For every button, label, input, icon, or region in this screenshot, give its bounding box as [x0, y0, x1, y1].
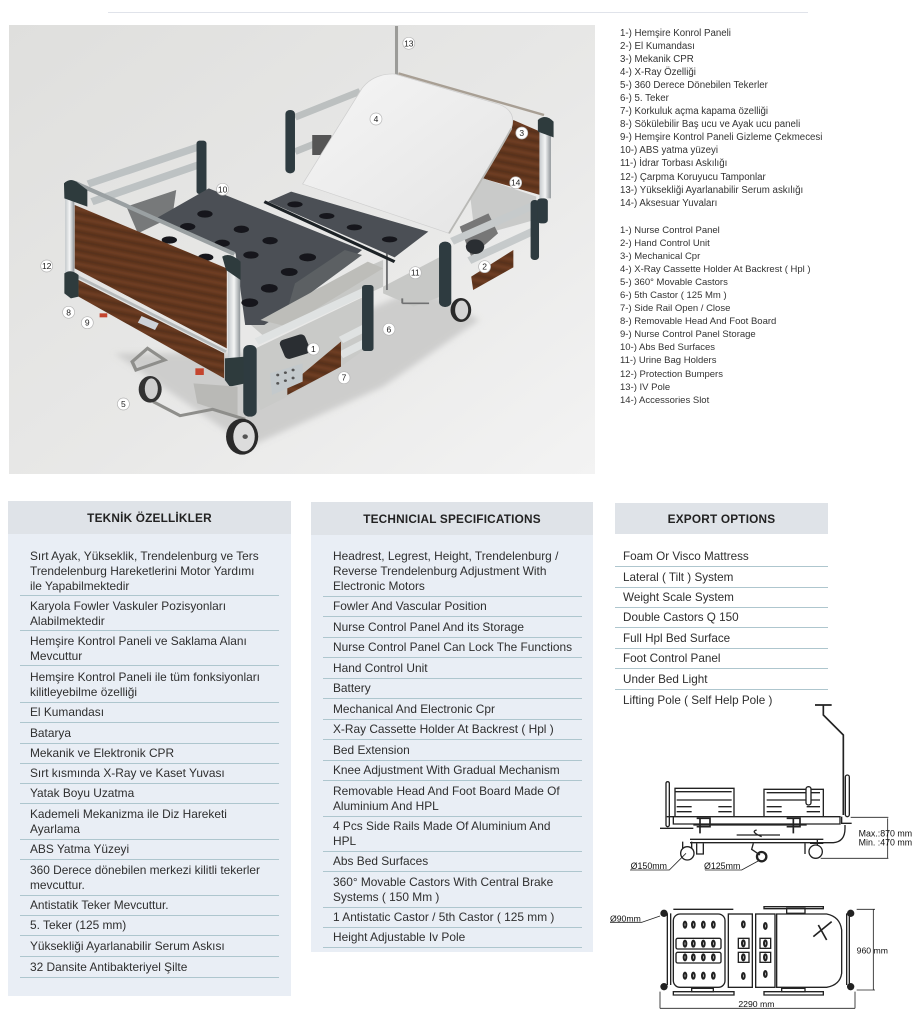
photo background	[9, 25, 595, 474]
numbered callouts: 13	[404, 38, 414, 48]
legend: English part list: 1-) Nurse Control Panel	[620, 225, 720, 236]
legend: Turkish part list: 4-) X-Ray Özelliği	[620, 67, 696, 78]
panel: export options: Weight Scale System	[623, 591, 734, 604]
legend: English part list: 6-) 5th Castor ( 125 Mm )	[620, 290, 727, 301]
panel: export options: Lifting Pole ( Self Help Pole )	[623, 694, 772, 707]
legend: English part list: 13-) IV Pole	[620, 382, 670, 393]
dimension labels, side view: Ø150mm	[631, 861, 667, 871]
legend: English part list: 2-) Hand Control Unit	[620, 238, 710, 249]
legend: Turkish part list: 2-) El Kumandası	[620, 41, 695, 52]
legend: Turkish part list	[620, 28, 822, 209]
panel: English technical specifications: Nurse Control Panel And its Storage	[333, 620, 524, 634]
legend: English part list: 5-) 360° Movable Castors	[620, 277, 728, 288]
dimension labels, side view: Min. :470 mm	[859, 837, 912, 847]
panel: export options	[615, 503, 828, 707]
panel: English technical specifications: X-Ray Cassette Holder At Backrest ( Hpl )	[333, 722, 554, 736]
numbered callouts: 1	[311, 344, 316, 354]
panel: English technical specifications: 1 Antistatic Castor / 5th Castor ( 125 mm )	[333, 910, 554, 924]
panel: Turkish technical features: Mevcuttur	[30, 649, 82, 663]
numbered callouts: 5	[121, 399, 126, 409]
legend: Turkish part list: 11-) İdrar Torbası Askılığı	[620, 158, 727, 169]
panel: English technical specifications: Nurse Control Panel Can Lock The Functions	[333, 640, 572, 654]
panel: Turkish technical features: Alabilmektedir	[30, 614, 105, 628]
legend: English part list: 14-) Accessories Slot	[620, 395, 709, 406]
panel: Turkish technical features: Sırt kısmında X-Ray ve Kaset Yuvası	[30, 766, 225, 780]
dimension labels, top view	[610, 914, 888, 1009]
panel: English technical specifications: Hand Control Unit	[333, 661, 428, 675]
numbered callouts: 12	[42, 261, 52, 271]
panel: English technical specifications: Bed Extension	[333, 743, 410, 757]
dimension labels, top view: 2290 mm	[738, 999, 774, 1009]
legend: Turkish part list: 8-) Sökülebilir Baş ucu ve Ayak ucu paneli	[620, 119, 800, 130]
panel: Turkish technical features: Yatak Boyu Uzatma	[30, 786, 134, 800]
panel: Turkish technical features: 32 Dansite Antibakteriyel Şilte	[30, 960, 187, 974]
heading: Teknik Özellikler: TEKNİK ÖZELLİKLER	[87, 511, 212, 525]
numbered callouts: 7	[342, 373, 347, 383]
heading: Export Options: EXPORT OPTIONS	[668, 512, 775, 526]
numbered callouts: 4	[374, 114, 379, 124]
legend: English part list	[620, 225, 811, 406]
legend: Turkish part list: 6-) 5. Teker	[620, 93, 669, 104]
legend: English part list: 7-) Side Rail Open / Close	[620, 303, 730, 314]
panel: English technical specifications: Removable Head And Foot Board Made Of	[333, 784, 560, 798]
far side rail rear	[285, 91, 360, 173]
panel: English technical specifications: Battery	[333, 681, 371, 695]
heading: Export Options	[615, 503, 828, 534]
foot board with wood panels	[64, 180, 245, 387]
floor shadow	[115, 287, 479, 447]
panel: English technical specifications: Aluminium And HPL	[333, 799, 439, 813]
heading: Teknik Özellikler	[8, 501, 291, 534]
dimension labels, side view: Ø125mm	[704, 861, 740, 871]
panel: English technical specifications: Knee Adjustment With Gradual Mechanism	[333, 763, 560, 777]
panel: English technical specifications: 360° Movable Castors With Central Brake	[333, 875, 553, 889]
panel: export options: Double Castors Q 150	[623, 611, 739, 624]
far side rail foot end	[439, 198, 548, 322]
panel: Turkish technical features: 5. Teker (125 mm)	[30, 918, 126, 932]
legend: Turkish part list: 14-) Aksesuar Yuvaları	[620, 198, 717, 209]
panel: English technical specifications: Mechanical And Electronic Cpr	[333, 702, 495, 716]
panel: English technical specifications: Reverse Trendelenburg Adjustment With	[333, 564, 546, 578]
panel: Turkish technical features: mevcuttur.	[30, 878, 85, 892]
near-left back rail	[88, 141, 206, 233]
legend: English part list: 9-) Nurse Control Panel Storage	[620, 329, 756, 340]
panel: Turkish technical features	[8, 501, 291, 996]
panel: Turkish technical features: kilitleyebilme özelliği	[30, 685, 137, 699]
panel: Turkish technical features: Trendelenburg Hareketlerini Motor Yardımı	[30, 564, 254, 578]
panel: Turkish technical features: Kademeli Mekanizma ile Diz Hareketi	[30, 807, 227, 821]
legend: Turkish part list: 3-) Mekanik CPR	[620, 54, 694, 65]
backrest X-ray panel	[303, 74, 513, 233]
heading: Technical Specifications	[311, 502, 593, 535]
mattress platform: leg sections	[153, 188, 428, 327]
panel: Turkish technical features: 360 Derece dönebilen merkezi kilitli tekerler	[30, 863, 260, 877]
panel: Turkish technical features: Mekanik ve Elektronik CPR	[30, 746, 174, 760]
legend: Turkish part list: 7-) Korkuluk açma kapama özelliği	[620, 106, 768, 117]
dimension labels, side view: Max.:870 mm	[859, 829, 912, 839]
technical drawing: top view with dimensions	[610, 906, 888, 1009]
legend: Turkish part list: 10-) ABS yatma yüzeyi	[620, 145, 718, 156]
panel: Turkish technical features: Hemşire Kontrol Paneli ve Saklama Alanı	[30, 634, 247, 648]
numbered callouts: 14	[511, 178, 521, 188]
heading: Technical Specifications: TECHNICIAL SPECIFICATIONS	[363, 512, 541, 526]
near side rail with nurse panel	[243, 285, 374, 417]
dimension labels, side view	[631, 829, 912, 871]
IV pole	[393, 26, 401, 77]
panel: Turkish technical features: Sırt Ayak, Yükseklik, Trendelenburg ve Ters	[30, 549, 259, 563]
panel: export options: Under Bed Light	[623, 673, 707, 686]
legend: English part list: 10-) Abs Bed Surfaces	[620, 342, 715, 353]
legend: English part list: 8-) Removable Head And Foot Board	[620, 316, 776, 327]
panel: Turkish technical features: Yüksekliği Ayarlanabilir Serum Askısı	[30, 939, 225, 953]
legend: Turkish part list: 13-) Yüksekliği Ayarlanabilir Serum askılığı	[620, 185, 803, 196]
numbered callouts	[41, 37, 528, 410]
panel: Turkish technical features: ile Yapabilmektedir	[30, 579, 129, 593]
panel: English technical specifications: Headrest, Legrest, Height, Trendelenburg /	[333, 549, 558, 563]
legend: English part list: 3-) Mechanical Cpr	[620, 251, 700, 262]
numbered callouts: 9	[85, 318, 90, 328]
numbered callouts: 2	[482, 262, 487, 272]
legend: English part list: 11-) Urine Bag Holders	[620, 355, 716, 366]
technical drawing: side view with dimensions	[630, 704, 912, 871]
dimension labels, top view: Ø90mm	[610, 914, 641, 924]
panel: English technical specifications: Abs Bed Surfaces	[333, 854, 428, 868]
legend: English part list: 4-) X-Ray Cassette Holder At Backrest ( Hpl )	[620, 264, 811, 275]
panel: Turkish technical features: El Kumandası	[30, 705, 104, 719]
panel: English technical specifications: 4 Pcs Side Rails Made Of Aluminium And	[333, 819, 550, 833]
numbered callouts: 3	[519, 128, 524, 138]
panel: English technical specifications: Electronic Motors	[333, 579, 425, 593]
panel: English technical specifications	[311, 502, 593, 952]
panel: export options: Full Hpl Bed Surface	[623, 632, 730, 645]
numbered callouts: 11	[411, 268, 420, 278]
panel: English technical specifications: Height Adjustable Iv Pole	[333, 930, 465, 944]
frame under bed	[245, 257, 441, 340]
product photo: hospital bed with numbered callouts	[9, 25, 595, 474]
numbered callouts: 8	[66, 307, 71, 317]
panel: Turkish technical features: Antistatik Teker Mevcuttur.	[30, 898, 169, 912]
panel: English technical specifications: HPL	[333, 834, 356, 848]
legend: Turkish part list: 12-) Çarpma Koruyucu Tamponlar	[620, 172, 766, 183]
panel: export options: Lateral ( Tilt ) System	[623, 571, 733, 584]
panel: English technical specifications: Systems ( 150 Mm )	[333, 890, 439, 904]
panel: export options: Foot Control Panel	[623, 652, 720, 665]
panel: Turkish technical features: Hemşire Kontrol Paneli ile tüm fonksiyonları	[30, 670, 260, 684]
numbered callouts: 10	[218, 184, 228, 194]
panel: English technical specifications: Fowler And Vascular Position	[333, 599, 487, 613]
numbered callouts: 6	[387, 324, 392, 334]
panel: export options: Foam Or Visco Mattress	[623, 550, 749, 563]
top divider	[108, 12, 808, 13]
legend: Turkish part list: 5-) 360 Derece Dönebilen Tekerler	[620, 80, 768, 91]
panel: Turkish technical features: Karyola Fowler Vaskuler Pozisyonları	[30, 599, 226, 613]
legend: Turkish part list: 9-) Hemşire Kontrol Paneli Gizleme Çekmecesi	[620, 132, 822, 143]
legend: Turkish part list: 1-) Hemşire Konrol Paneli	[620, 28, 731, 39]
dimension labels, top view: 960 mm	[857, 945, 888, 955]
legend: English part list: 12-) Protection Bumpers	[620, 369, 723, 380]
chassis, pedal and castors	[100, 313, 258, 455]
far head board	[398, 73, 554, 237]
panel: Turkish technical features: Batarya	[30, 726, 71, 740]
panel: Turkish technical features: Ayarlama	[30, 822, 80, 836]
panel: Turkish technical features: ABS Yatma Yüzeyi	[30, 842, 129, 856]
